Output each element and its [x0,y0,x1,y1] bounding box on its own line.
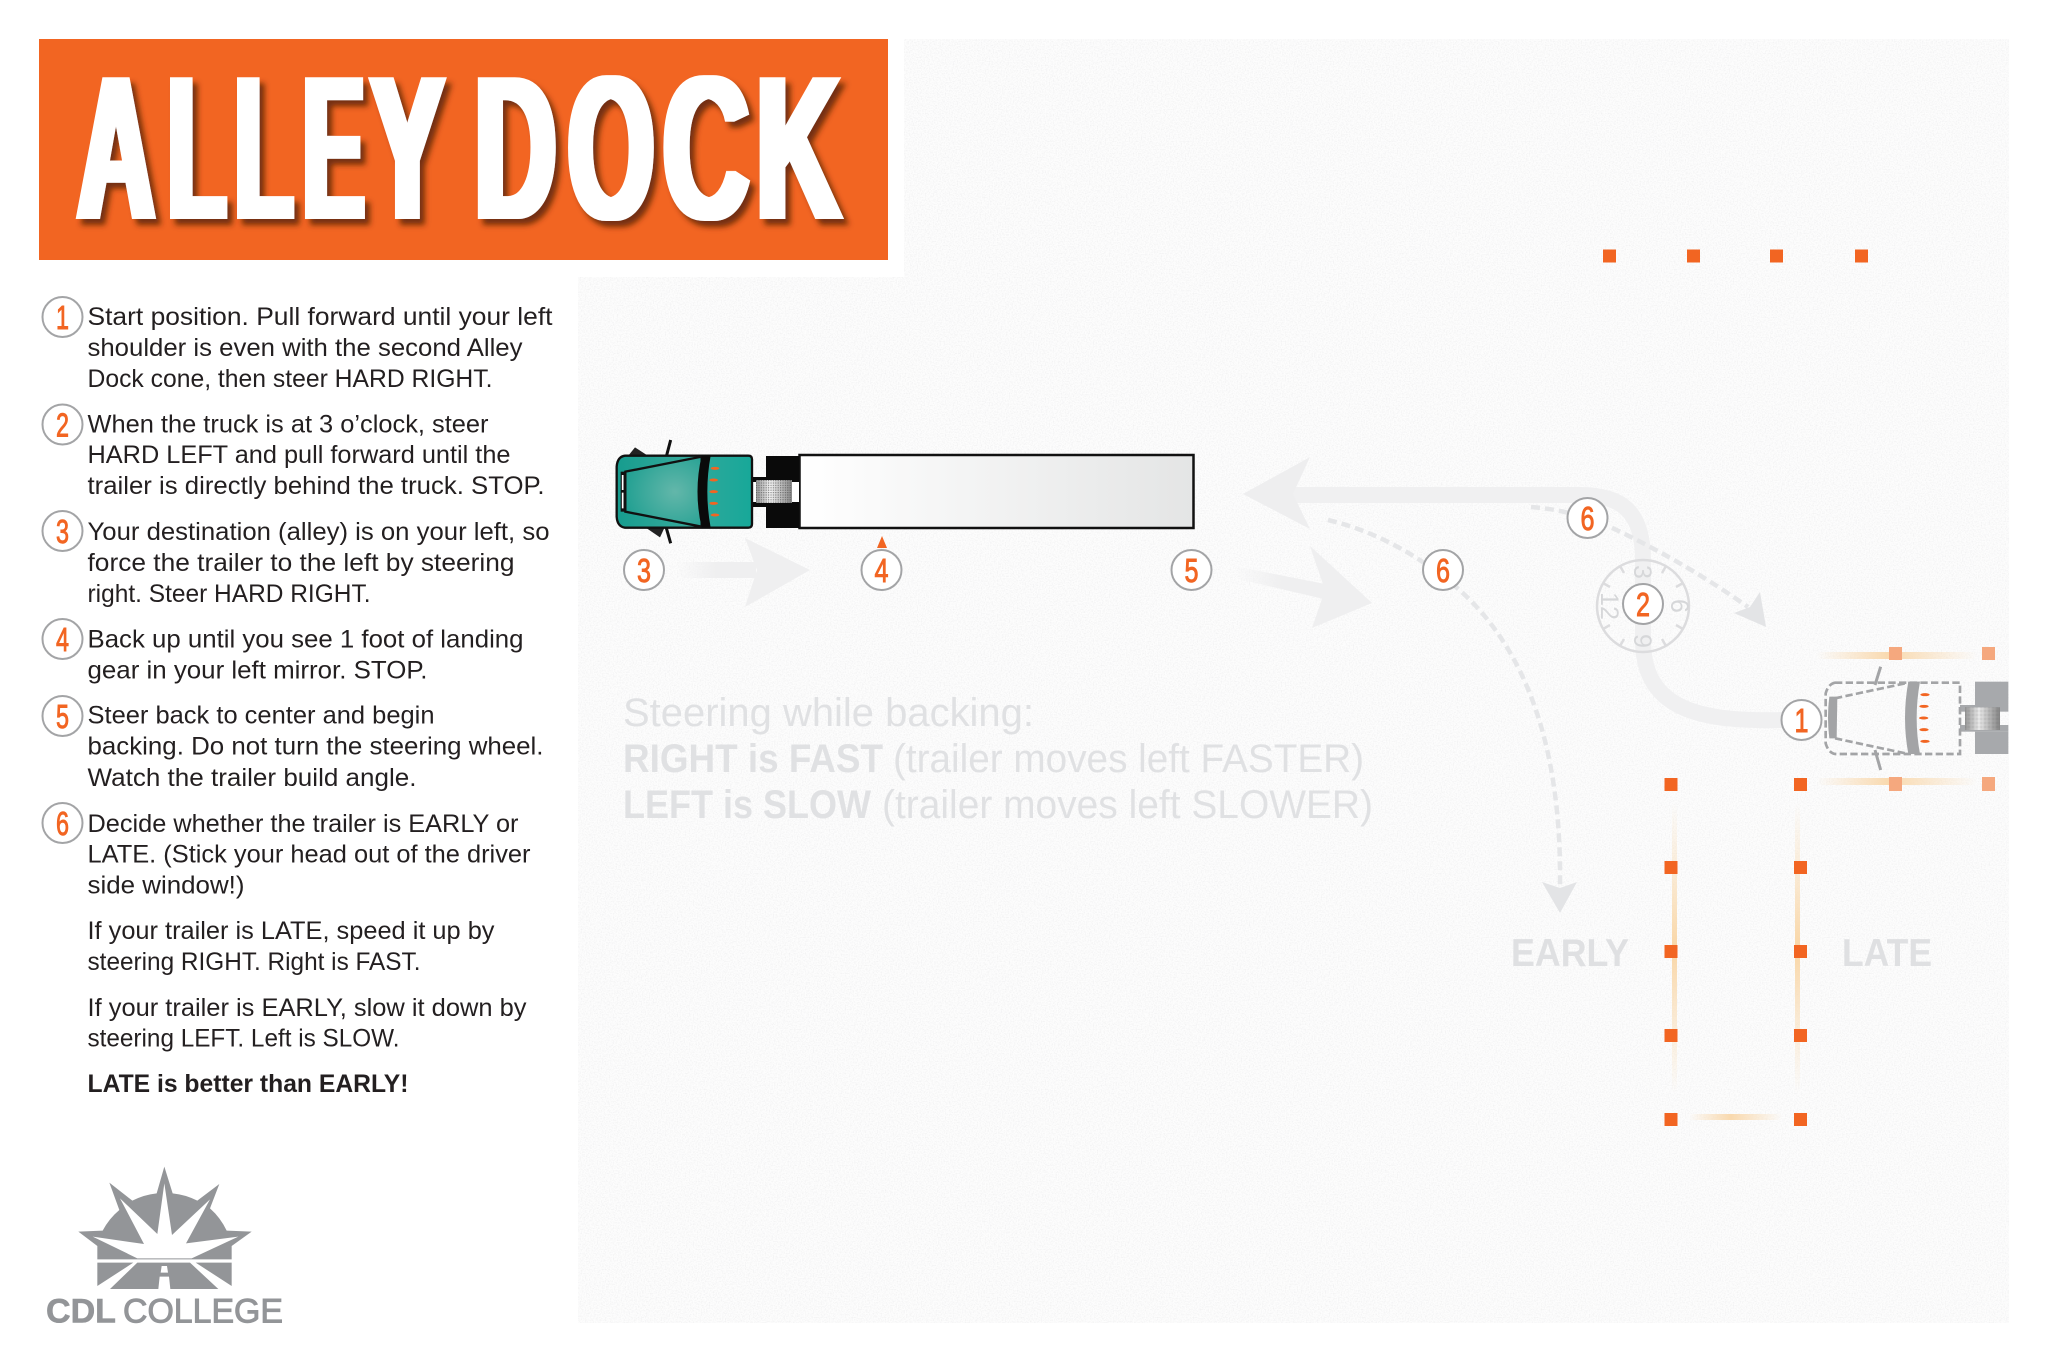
start lane lines [1817,652,1977,785]
numbered marker 5: 5 [1184,552,1198,589]
truck: ghost start position [1826,667,2008,770]
ghost cab [1826,667,1960,770]
step 1: shoulder is even with the second Alley [88,334,523,362]
step 4: gear in your left mirror. STOP. [88,656,428,684]
numbered marker 6 early: 6 [1436,552,1450,589]
steering text block [623,691,1373,827]
step 6: 6 [56,805,69,842]
panel: textured diagram background [578,39,2009,1323]
numbered marker 2 [1623,584,1663,624]
numbered marker 6 late [1568,498,1608,538]
title banner: E [303,33,364,263]
logo wordmark: COLLEGE [123,1292,283,1330]
logo wordmark: CDL [46,1292,116,1330]
ghost tractor rear [1960,682,2008,754]
logo wordmark [46,1292,283,1330]
arrow: dotted early path [1328,520,1577,913]
title banner: C [663,33,749,263]
step 2: When the truck is at 3 o’clock, steer [88,410,488,438]
step 6: side window!) [88,872,244,900]
title banner: O [568,33,654,263]
logo emblem [78,1167,252,1289]
numbered marker 3: 3 [637,552,651,589]
clock diagram: 3 [1628,565,1656,579]
clock diagram [1595,560,1693,652]
steering text block: RIGHT is FAST [623,737,883,781]
early note: steering LEFT. Left is SLOW. [88,1024,400,1052]
cones: top row [1603,250,1868,262]
step 5: Steer back to center and begin [88,702,434,730]
numbered marker 5 [1172,550,1212,590]
step 6: Decide whether the trailer is EARLY or [88,810,518,838]
trailer [800,455,1194,528]
numbered marker 2: 2 [1636,586,1650,623]
late note [88,917,495,976]
arrow: large path from start curving to the left [1243,457,1783,720]
early note [88,994,527,1052]
steering text block: (trailer moves left SLOWER) [882,783,1373,827]
early note: If your trailer is EARLY, slow it down by [88,994,527,1022]
numbered marker 1 [1782,700,1822,740]
arrow: step 5 direction [1234,546,1372,628]
steering text block: (trailer moves left FASTER) [893,737,1364,781]
alley lines [1672,803,1800,1120]
step 2: trailer is directly behind the truck. STOP. [88,472,544,500]
step 2: 2 [56,406,69,444]
numbered marker 6 late: 6 [1580,500,1594,537]
step 1: Start position. Pull forward until your left [88,303,553,331]
step 1: 1 [56,299,69,336]
cones: alley [1664,778,1807,1126]
step 5: backing. Do not turn the steering wheel. [88,732,544,760]
step 3: right. Steer HARD RIGHT. [88,580,370,608]
arrow: dotted late path [1531,507,1766,627]
title banner [39,33,888,263]
steering text block: LEFT is SLOW [623,783,871,827]
label: LATE: LATE [1842,932,1932,975]
numbered marker 4 [862,550,902,590]
step 3: 3 [56,513,69,550]
step 3: Your destination (alley) is on your left, so [88,518,550,546]
clock diagram: 12 [1595,592,1623,620]
numbered marker 4: 4 [874,552,888,589]
arrow: step 3 direction [676,538,810,607]
title banner: L [235,33,293,263]
step 5: 5 [56,698,69,735]
title banner: Y [370,33,444,263]
title banner: K [756,33,841,263]
step 4: Back up until you see 1 foot of landing [88,626,524,654]
cab [617,440,752,543]
step 3: force the trailer to the left by steering [88,549,514,577]
title banner: L [168,33,226,263]
step 3 [42,511,550,608]
steering text block: Steering while backing: [623,691,1034,735]
step 5: Watch the trailer build angle. [88,764,416,792]
numbered marker 3 [624,550,664,590]
late note: If your trailer is LATE, speed it up by [88,917,495,945]
step 6 [42,803,530,900]
logo: CDL College [46,1167,283,1330]
instructions list [42,297,553,1098]
tractor frame and wheels [752,456,799,528]
numbered marker 6 early [1423,550,1463,590]
title banner: A [78,33,154,263]
label: EARLY: EARLY [1511,932,1629,975]
step 4: 4 [56,621,69,658]
step 4 [42,619,524,684]
clock diagram: 6 [1665,599,1693,613]
numbered marker 1: 1 [1794,702,1808,739]
step 6: LATE. (Stick your head out of the driver [88,840,530,868]
clock diagram: 9 [1628,634,1656,648]
step 2: HARD LEFT and pull forward until the [88,441,510,469]
step 5 [42,696,544,792]
late note: steering RIGHT. Right is FAST. [88,948,420,976]
step 1 [42,297,553,393]
truck and trailer: main position [617,440,1194,543]
title banner: D [475,33,556,263]
marker: step 4 triangle [877,536,887,548]
step 1: Dock cone, then steer HARD RIGHT. [88,365,492,393]
cones: start lane [1889,647,1995,791]
bold conclusion: LATE is better than EARLY! [88,1070,408,1098]
step 2 [42,404,544,500]
